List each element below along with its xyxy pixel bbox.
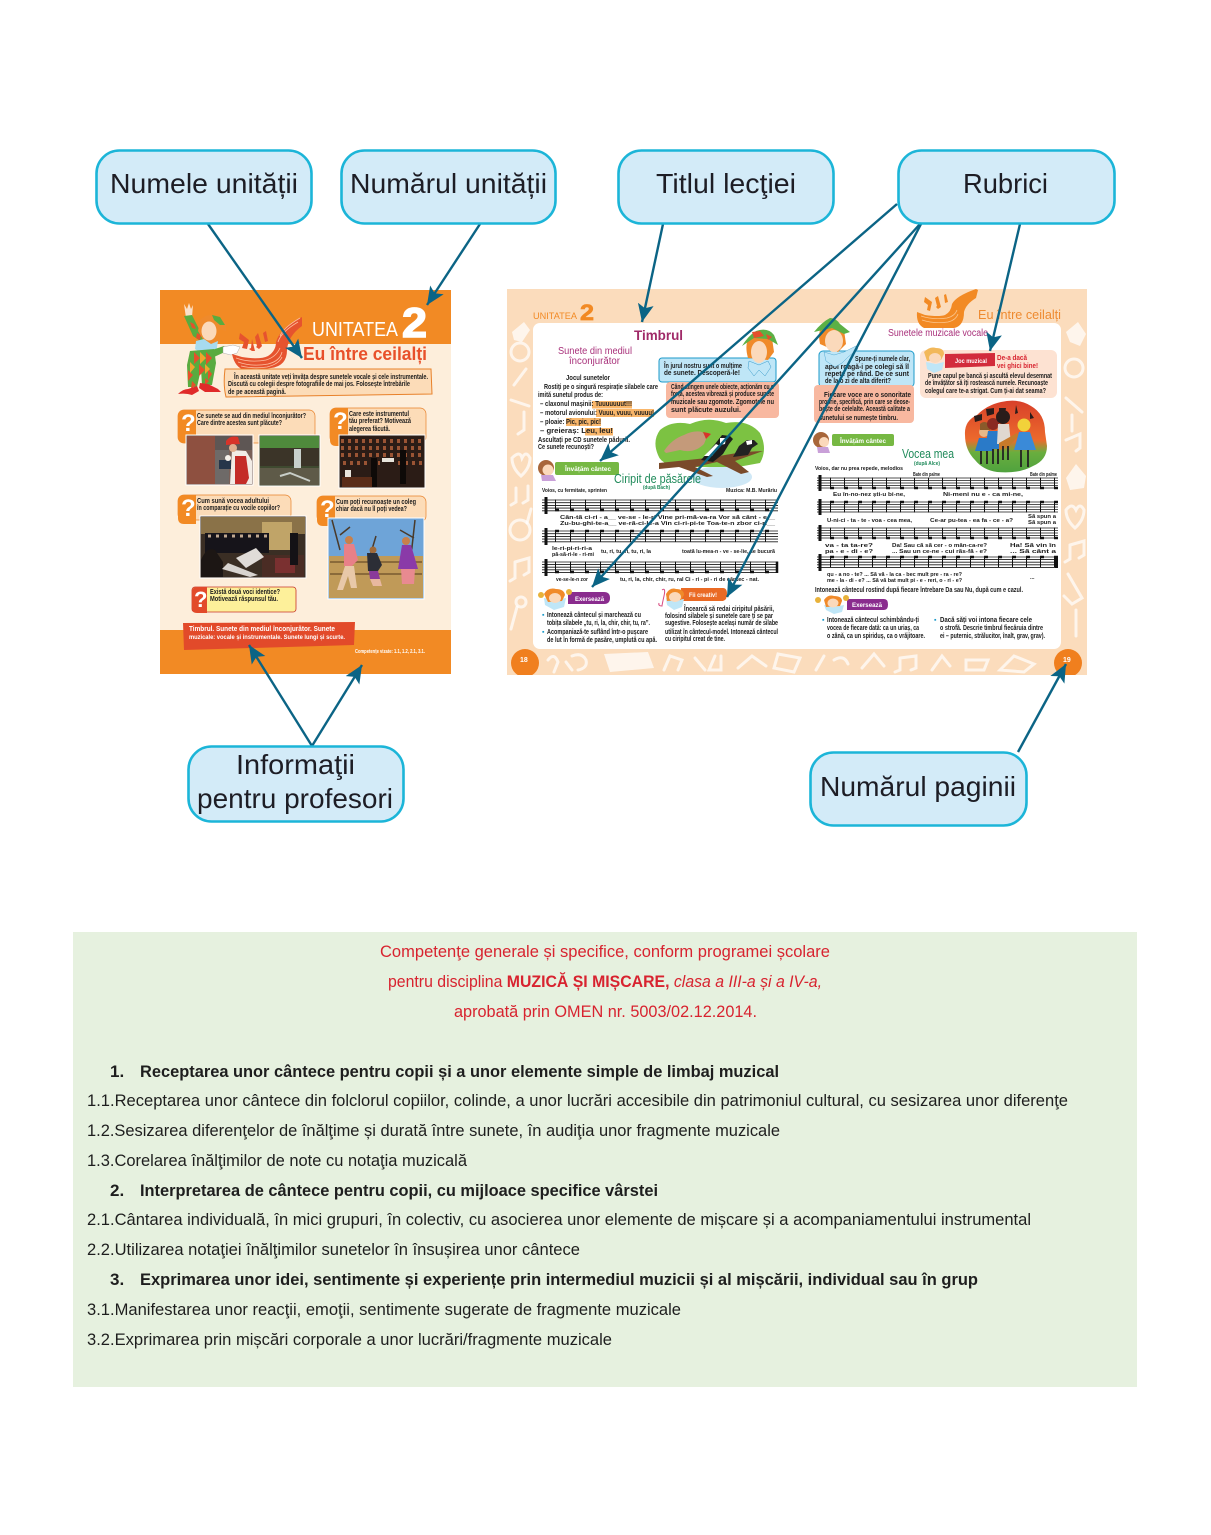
unit name right page: Eu între ceilalți <box>978 308 1061 322</box>
song meta right: Bate din palme <box>1030 472 1057 478</box>
arrow: rubric 3 <box>727 224 921 597</box>
text block: game of sounds: – ploaie: Pic, pic, pic! <box>540 419 601 426</box>
decorative doodles <box>510 322 1086 672</box>
music score left page: le-ri-pi-ri-ri-a <box>552 546 593 552</box>
music score right page: Ha! Să vin în <box>1010 543 1057 549</box>
right lesson subtitle: Sunetele muzicale vocale <box>888 328 988 339</box>
competence group 3: 3.1.Manifestarea unor reacţii, emoţii, sentimente sugerate de fragmente muzicale <box>87 1300 681 1319</box>
learning label left <box>538 460 619 481</box>
song title left: (după Bach) <box>643 485 670 491</box>
competence group 1: 1.1.Receptarea unor cântece din folclorul copiilor, colinde, a unor lucrări accesibile din patrimoniul cultural, cu sesizarea unor diferenţe <box>87 1091 1068 1110</box>
callout: Numărul paginii: Numărul paginii <box>820 771 1016 802</box>
question box 4 with photo: Cum poți recunoaște un coleg <box>336 499 416 506</box>
page number 18: 18 <box>520 657 528 664</box>
song meta left <box>542 488 777 493</box>
arrow: rubric 4 <box>990 224 1020 351</box>
arrow: unit number <box>427 224 480 305</box>
blue tip box right <box>819 351 914 387</box>
question box 3 with photo: Cum sună vocea adultului <box>197 498 269 505</box>
question box 4 with photo: chiar dacă nu îl poți vedea? <box>336 506 407 513</box>
exercise bullet list right <box>822 617 1045 640</box>
song meta right: Voios, dar nu prea repede, melodios <box>815 466 903 472</box>
lesson title: Timbrul <box>634 327 683 343</box>
competence group 1 <box>87 1062 1068 1170</box>
competences heading: aprobată prin OMEN nr. 5003/02.12.2014. <box>454 1002 757 1021</box>
competence group 1: 1.3.Corelarea înălţimilor de note cu notaţia muzicală <box>87 1151 468 1170</box>
pink info box right <box>814 385 914 423</box>
pink info box: Când atingem unele obiecte, acționăm cu o <box>671 384 774 391</box>
music score left page: ve-se-le-n zor <box>556 577 589 583</box>
creative text block: sugestive. Folosește același număr de silabe <box>665 620 778 627</box>
intro text box: de pe această pagină. <box>228 389 286 396</box>
icon: girl character <box>742 330 778 376</box>
music score right page: ... <box>1030 575 1035 581</box>
question box 1 with photos <box>178 410 320 486</box>
teacher info banner: muzicale: vocale și instrumentale. Sunete lungi și scurte. <box>189 634 345 641</box>
music score left page <box>542 497 778 583</box>
song meta left: Muzica: M.B. Murăriu <box>726 488 777 494</box>
competence group 3: 3. <box>110 1270 124 1289</box>
music score right page: ... Să cânt a <box>1010 549 1057 555</box>
music score right page: Să spun a <box>1028 514 1057 520</box>
music score right page: U-ni-ci - ta - te - voa - cea mea, <box>827 518 912 524</box>
competences note: Competențe vizate: 1.1, 1.2, 2.1, 3.1. <box>355 649 425 655</box>
blue tip box: În jurul nostru sunt o mulțime <box>663 361 742 370</box>
question box 3 with photo: în comparație cu vocile copiilor? <box>196 505 280 512</box>
exercise bullet list right: ▪ <box>822 617 825 624</box>
music score right page: pa - e - di - e? <box>825 549 874 555</box>
teacher info banner: Timbrul. Sunete din mediul înconjurător. Sunete <box>189 626 335 633</box>
game panel: colegul care te-a strigat. Cum ți-ai dat seama? <box>925 388 1046 395</box>
question box 4 with photo: ? <box>320 496 335 523</box>
song title left <box>614 474 700 490</box>
callout: Titlul lecției <box>618 150 834 224</box>
arrow: teacher info banner <box>249 645 312 746</box>
exercise bullet list left: Acompaniază-te suflând într-o pușcare <box>547 629 648 636</box>
music score left page: toată lu-mea-n - ve - se-lie, se bucură <box>682 549 776 555</box>
blue tip box: de sunete. Descoperă-le! <box>664 370 740 377</box>
game panel: Joc muzical <box>955 358 987 365</box>
pink info box right: bește de celelalte. Această calitate a <box>819 406 910 413</box>
pink info box: forță, acestea vibrează și produce sunete <box>671 391 774 398</box>
learning label right: Învățăm cântec <box>839 436 886 445</box>
exercise bullet list left: Intonează cântecul și marchează cu <box>547 612 641 619</box>
creative text block: folosind silabele și sunetele care ți se par <box>665 613 773 620</box>
blue tip box right: apoi roagă-i pe colegi să îl <box>825 364 909 371</box>
arrow: rubric 2 <box>592 224 920 587</box>
pink info box: muzicale sau zgomote. Zgomotele nu <box>671 399 774 406</box>
question box 1 with photos: ? <box>181 410 196 437</box>
music score right page: Să spun a <box>1028 520 1057 526</box>
heading: UNITATEA 2: UNITATEA <box>312 319 399 341</box>
panel: competences <box>73 932 1137 1387</box>
subtitle: Sunete din mediul <box>558 346 632 357</box>
intro text box: În această unitate veți învăța despre sunetele vocale și cele instrumentale. <box>233 372 428 381</box>
text block: game of sounds: Rostiți pe o singură respirație silabele care <box>544 384 658 391</box>
competence group 3: Exprimarea unor idei, sentimente și experiențe prin intermediul muzicii și al mișcării, individual sau în grup <box>140 1270 978 1289</box>
callout: Informații pentru profesori: pentru profesori <box>197 783 393 814</box>
competence group 1: Receptarea unor cântece pentru copii și a unor elemente simple de limbaj muzical <box>140 1062 779 1081</box>
pink info box <box>666 382 779 418</box>
blue tip box right: repete pe rând. De ce sunt <box>825 371 910 378</box>
panel: lesson spread <box>507 289 1087 677</box>
label: creative: Fii creativ! <box>689 592 717 599</box>
callout: Rubrici <box>898 150 1114 224</box>
song title right: Vocea mea <box>902 447 954 461</box>
teacher info banner <box>183 622 355 650</box>
music score left page: tu, ri, la, chir, chir, ru, ral Ci - ri - pi - ri de cântec - nat. <box>620 577 759 583</box>
exercise bullet list right: Intonează cântecul schimbându-ți <box>827 617 919 624</box>
icon: orange music ribbon <box>917 289 978 328</box>
exercise bullet list right: o zână, ca un spiriduș, ca o vrăjitoare. <box>827 633 925 640</box>
subtitle <box>558 346 632 367</box>
competence group 2 <box>87 1181 1031 1259</box>
intro text box: Discută cu colegii despre fotografiile de mai jos. Folosește întrebările <box>228 381 410 388</box>
exercise bullet list right: ▪ <box>934 617 937 624</box>
exercise bullet list right: o strofă. Descrie timbrul fiecăruia dintre <box>940 625 1043 632</box>
arrow: teacher info competences <box>312 665 362 746</box>
blue tip box right: de la o zi de alta diferit? <box>825 378 891 385</box>
arrow: unit name <box>208 224 302 358</box>
text block: game of sounds: Ascultați pe CD sunetele pădurii. <box>538 437 630 444</box>
game panel: de învățător să îți rostească numele. Recunoaște <box>925 380 1048 387</box>
question box 2 with photo: Care este instrumentul <box>349 411 409 418</box>
game panel: vei ghici bine! <box>997 363 1038 370</box>
pink info box right: proprie, specifică, prin care se deose- <box>819 399 910 406</box>
exercise bullet list left: ▪ <box>542 629 545 636</box>
exercise bullet list left: de lut în formă de pasăre, umplută cu apă. <box>547 637 657 644</box>
competence group 2: 2.1.Cântarea individuală, în mici grupuri, în colectiv, cu asocierea unor elemente de mișcare și a acompaniamentului instrumental <box>87 1210 1031 1229</box>
game panel: Pune capul pe bancă și ascultă elevul desemnat <box>928 373 1053 380</box>
competence group 2: 2.2.Utilizarea notaţiei înălţimilor sunetelor în însușirea unor cântece <box>87 1240 580 1259</box>
photo: choir in church <box>200 516 306 578</box>
question box 4 with photo <box>317 496 426 599</box>
subtitle: înconjurător <box>568 356 621 367</box>
callout: Informații pentru profesori: Informaţii <box>236 749 355 780</box>
page number 18 <box>511 649 539 677</box>
question box 5: ? <box>194 587 207 612</box>
exercise bullet list right: Dacă săți voi intona fiecare cele <box>940 617 1032 624</box>
music score right page: Da! Sau că să cer - o mân-ca-re? <box>892 543 988 549</box>
text block: game of sounds: imită sunetul produs de: <box>538 392 603 399</box>
competence group 3: 3.2.Exprimarea prin mișcări corporale a unor lucrări/fragmente muzicale <box>87 1330 612 1349</box>
learning label right <box>813 432 894 453</box>
photo: worker drilling <box>186 435 253 485</box>
question box 5 <box>192 587 296 613</box>
question box 2 with photo: alegerea făcută. <box>349 426 390 433</box>
icon: jester character <box>178 303 240 395</box>
panel: unit opening page <box>160 290 451 674</box>
label: exercise left: Exersează <box>575 596 604 603</box>
question box 1 with photos: Ce sunete se aud din mediul înconjurător? <box>197 413 306 420</box>
song meta left: Voios, cu fermitate, sprinten <box>542 488 608 494</box>
label: creative <box>659 588 727 610</box>
music score right page: Eu în-no-nez ști-u bi-ne, <box>833 492 906 498</box>
question box 2 with photo: ? <box>333 408 348 435</box>
creative text block: Încearcă să redai ciripitul păsării, <box>683 604 774 613</box>
photo: children playing <box>328 518 424 599</box>
label: exercise right <box>815 595 888 614</box>
song instruction: Intonează cântecul rostind după fiecare întrebare Da sau Nu, după cum e cazul. <box>815 587 1023 594</box>
page number 19 <box>1054 649 1082 677</box>
game panel: De-a dacă <box>997 355 1027 362</box>
music score right page <box>817 475 1058 584</box>
music score left page: Zu-bu-ghi-te-a__ ve-ră-ci-le-a Vin ci-ri-pi-te Toa-te-n zbor ci-ri__ <box>560 521 776 527</box>
competences heading <box>380 942 830 1021</box>
music score right page: va - ta ta-re? <box>825 543 874 549</box>
music score right page: ... Sau un ce-ne - cui răs-fă - e? <box>892 549 988 555</box>
unit label left page <box>534 304 594 320</box>
arrow: page number <box>1018 664 1066 752</box>
question box 3 with photo <box>178 495 306 578</box>
song title right <box>902 449 954 466</box>
exercise bullet list left <box>542 612 657 644</box>
song meta right: Bate din palme <box>913 472 940 478</box>
exercise bullet list left: ▪ <box>542 612 545 619</box>
competence group 3 <box>87 1270 978 1349</box>
question box 5: Motivează răspunsul tău. <box>210 596 278 603</box>
label: exercise right: Exersează <box>852 602 882 609</box>
creative text block <box>665 604 778 643</box>
illustration: birds on branch <box>655 420 764 488</box>
callout: Numărul unității <box>342 150 556 224</box>
photo: orchestra <box>339 435 425 488</box>
competence group 2: 2. <box>110 1181 124 1200</box>
music score left page: tu, ri, tu, ri, tu, ri, la <box>601 549 652 555</box>
callout: Numele unității <box>96 150 312 224</box>
white content area <box>533 323 1061 649</box>
music score right page: Ce-ar pu-tea - ea fa - ce - a? <box>930 518 1014 524</box>
exercise bullet list right: vocea de fiecare dată: ca un uriaș, ca <box>827 625 919 632</box>
text block: game of sounds: Jocul sunetelor <box>566 375 610 382</box>
question box 2 with photo <box>330 408 426 488</box>
callout: Numărul paginii <box>810 752 1026 826</box>
callout: Titlul lecției: Titlul lecţiei <box>656 168 796 199</box>
arrow: lesson title <box>642 224 663 322</box>
song title left: Ciripit de păsărele <box>614 472 701 486</box>
heading: unit name: Eu între ceilalți <box>303 344 427 364</box>
intro text box <box>224 369 432 397</box>
heading: UNITATEA 2: 2 <box>402 299 427 346</box>
music score right page: qu - a no - te? ... Să vă - la ca - bec mult pre - ra - re? <box>827 572 963 578</box>
icon: red music notes ribbon <box>232 317 302 370</box>
competence group 1: 1. <box>110 1062 124 1081</box>
song title right: (după Alce) <box>914 461 940 467</box>
photo: waterfall <box>259 435 320 486</box>
exercise bullet list right: ei – puternic, strălucitor, înalt, grav, grav). <box>940 633 1045 640</box>
music score right page: me - la - di - e? ... Să vă bat mult pi - e - reri, o - ri - e? <box>827 578 963 584</box>
question box 3 with photo: ? <box>181 495 196 522</box>
learning label left: Învățăm cântec <box>564 464 611 473</box>
text block: game of sounds: Ce sunete recunoști? <box>538 444 594 451</box>
pink info box right: sunetului se numește timbru. <box>819 415 898 422</box>
competences heading: Competenţe generale și specifice, conform programei școlare <box>380 942 830 961</box>
callout: Rubrici: Rubrici <box>963 168 1048 199</box>
unit label left page: UNITATEA <box>533 311 577 321</box>
arrow: rubric 1 <box>600 204 897 461</box>
illustration: children band <box>965 401 1047 472</box>
blue tip box right: Spune-ți numele clar, <box>855 356 910 363</box>
question box 2 with photo: tău preferat? Motivează <box>349 418 411 425</box>
competences heading: pentru disciplina MUZICĂ ȘI MIȘCARE, clasa a III-a și a IV-a, <box>388 972 822 991</box>
game panel <box>920 348 1057 398</box>
callout: Numărul unității: Numărul unității <box>350 168 547 199</box>
page number 19: 19 <box>1063 657 1071 664</box>
question box 1 with photos: Care dintre acestea sunt plăcute? <box>197 420 282 427</box>
music score left page: pă-să-ri-le - ri-mi <box>552 552 594 558</box>
blue tip box <box>659 358 776 382</box>
pink info box: sunt plăcute auzului. <box>671 407 741 414</box>
callout: Informații pentru profesori <box>188 746 404 822</box>
label: exercise left <box>538 589 610 610</box>
text block: game of sounds: – greieraș: Leu, leu! <box>540 428 613 435</box>
competence group 2: Interpretarea de cântece pentru copii, cu mijloace specifice vârstei <box>140 1181 658 1200</box>
competence group 1: 1.2.Sesizarea diferenţelor de înălţime și durată între sunete, în audiţia unor fragmente muzicale <box>87 1121 780 1140</box>
question box 5: Există două voci identice? <box>210 589 280 596</box>
music score left page: Cân-tă ci-ri - a__ ve-se - le-ri Vine pri-mă-va-ra Vor să cânt - e__ <box>560 515 776 521</box>
unit label left page: 2 <box>580 300 594 325</box>
text block: game of sounds: – motorul avionului: Vuuu, vuuu, vuuuu! <box>540 410 654 417</box>
text block: game of sounds <box>538 375 658 451</box>
creative text block: cu ciripitul creat de tine. <box>665 636 725 643</box>
pink info box right: Fiecare voce are o sonoritate <box>824 392 911 399</box>
callout: Numele unității: Numele unității <box>110 168 298 199</box>
exercise bullet list left: tobița silabele „tu, ri, la, chir, chir, tu, ra”. <box>547 620 650 627</box>
icon: girl character right <box>814 318 858 367</box>
heading: UNITATEA 2 <box>312 299 427 346</box>
song meta right <box>815 466 1057 478</box>
text block: game of sounds: – claxonul mașinii: Tuuuuuuut!!! <box>540 401 632 408</box>
music score right page: Ni-meni nu e - ca mi-ne, <box>943 492 1024 498</box>
creative text block: utilizat în cântecul-model. Intonează cântecul <box>665 629 778 636</box>
